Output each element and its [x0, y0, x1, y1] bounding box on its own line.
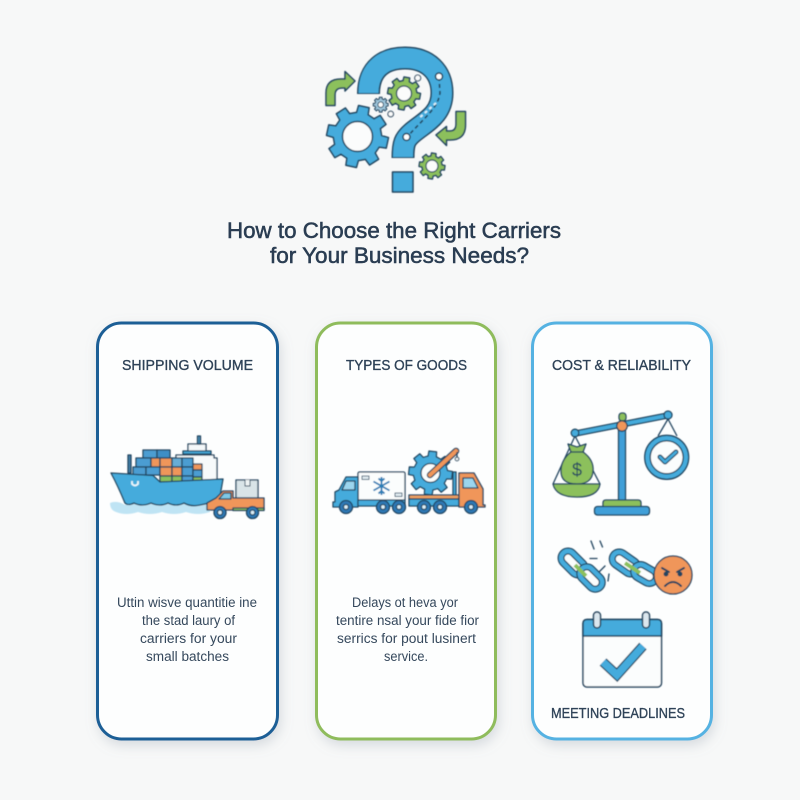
- panel: types of goods: [316, 323, 496, 739]
- title: for Your Business Needs?: [270, 243, 529, 268]
- panel: cost and reliability: [532, 323, 712, 739]
- icon: balance scale: [553, 411, 689, 515]
- left chain: [558, 548, 605, 592]
- description text: [336, 595, 479, 664]
- icon: cargo ship and truck: [110, 436, 264, 518]
- break marks: [590, 541, 609, 581]
- base: [603, 500, 641, 507]
- icon: broken chain and angry face: [558, 541, 692, 594]
- beam: [575, 413, 668, 436]
- mast: [128, 455, 131, 473]
- check circle: [645, 435, 689, 479]
- question mark: [368, 58, 442, 192]
- scale pan: [553, 484, 600, 497]
- right chain: [610, 549, 659, 586]
- title: How to Choose the Right Carriers: [227, 218, 561, 243]
- pickup truck: [207, 480, 264, 518]
- arrow: right green: [436, 112, 466, 146]
- heading: cost and reliability: COST & RELIABILITY: [552, 357, 691, 374]
- icon: balance scale: $: [572, 460, 582, 480]
- post: [619, 413, 626, 421]
- description text: service.: [384, 649, 428, 664]
- label: meeting deadlines: MEETING DEADLINES: [551, 705, 685, 722]
- description text: tentire nsal your fide fior: [336, 613, 479, 628]
- water: [110, 502, 210, 514]
- description text: serrics for pout lusinert: [337, 631, 476, 646]
- refrigerated truck: [333, 472, 406, 514]
- description text: carriers for your: [140, 631, 238, 646]
- hull: [111, 473, 223, 506]
- heading: types of goods: TYPES OF GOODS: [346, 357, 467, 374]
- description text: small batches: [146, 649, 229, 664]
- small bubbles: [388, 75, 421, 117]
- icon: refrigerated truck and crane truck: [333, 449, 485, 514]
- large blue gear: [321, 100, 394, 173]
- panel: shipping volume: [98, 323, 278, 739]
- green gear: [385, 75, 423, 112]
- ship superstructure: [176, 455, 217, 483]
- heading: shipping volume: SHIPPING VOLUME: [122, 357, 253, 374]
- lower green gear: [418, 152, 446, 180]
- arrow: upper left green: [326, 72, 355, 106]
- description text: [117, 595, 257, 664]
- angry face: [654, 556, 692, 594]
- description text: the stad laury of: [142, 613, 235, 628]
- description text: Delays ot heva yor: [352, 595, 458, 610]
- title: [227, 218, 561, 268]
- money bag: [561, 444, 593, 484]
- containers: [133, 450, 202, 483]
- small grey-blue gear: [373, 97, 388, 112]
- icon: calendar with check: [583, 612, 662, 687]
- icon: question mark with gears: [321, 58, 466, 192]
- crane truck: [407, 449, 485, 514]
- strings: [553, 419, 677, 484]
- description text: Uttin wisve quantitie ine: [117, 595, 257, 610]
